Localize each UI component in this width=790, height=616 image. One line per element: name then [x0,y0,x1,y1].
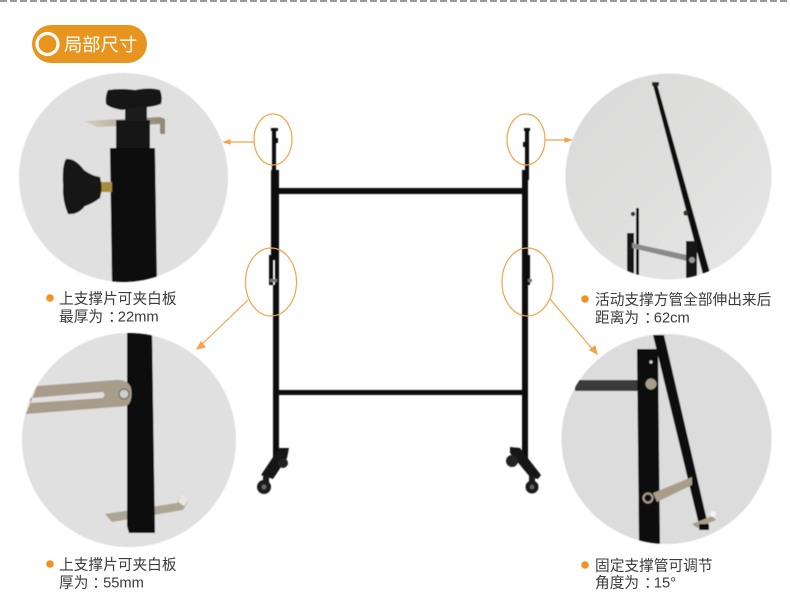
panel: bottom-left detail photo [22,330,236,547]
caption: top-right: 活动支撑方管全部伸出来后 [595,290,772,308]
caption: bottom-left [46,556,177,592]
section heading badge: 局部尺寸 [64,34,137,55]
callout: top-right ring and arrow [507,114,571,165]
frame: right foot and casters [506,447,541,494]
caption: top-right: 距离为 ：62cm [595,310,690,326]
frame: crossbars [275,188,525,395]
caption: top-left: 上支撑片可夹白板 [59,290,177,308]
caption: bottom-right: 角度为 ：15° [595,574,676,592]
callout: middle-left ring and arrow [197,248,296,349]
top dashed border [0,0,790,2]
caption: bottom-left: 上支撑片可夹白板 [59,556,177,574]
frame: left foot and casters [257,448,289,494]
caption: top-left: 最厚为 ：22mm [59,308,159,326]
caption: top-left [46,290,177,326]
caption: top-right [581,290,772,326]
callout: middle-right ring and arrow [502,248,597,354]
caption: bottom-right: 固定支撑管可调节 [595,558,713,574]
panel: top-left detail photo [19,73,228,284]
section heading badge [32,25,147,63]
whiteboard frame [257,128,541,494]
panel: top-right detail photo [566,74,772,283]
callout: top-left ring and arrow [224,114,292,165]
caption: bottom-left: 厚为 ：55mm [59,574,144,592]
frame: right upright [522,128,532,460]
panel: bottom-right detail photo [562,334,772,546]
frame: left upright [269,128,279,460]
caption: bottom-right [581,558,713,592]
